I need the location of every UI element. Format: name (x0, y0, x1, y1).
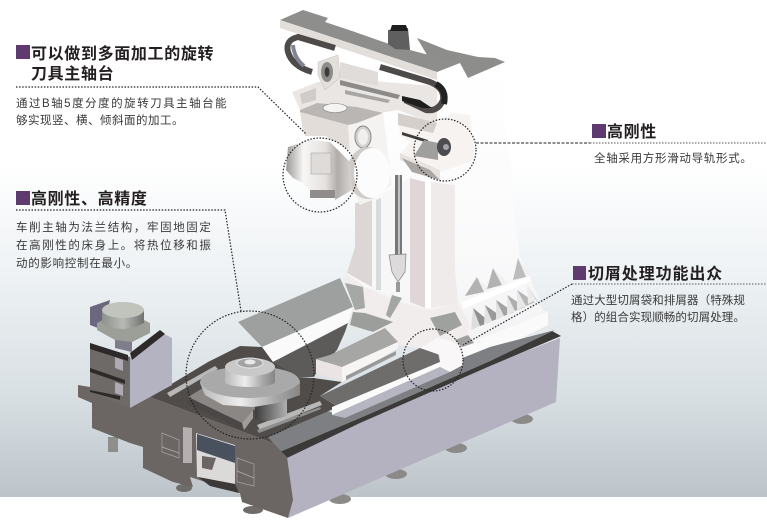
column base block (462, 312, 548, 370)
callout: chip handling (571, 264, 745, 324)
heading (592, 122, 657, 141)
body text (571, 293, 745, 324)
body text: 通过大型切屑袋和排屑器（特殊规 (571, 293, 745, 307)
callout circle: spindle (283, 138, 357, 212)
callout circle: guideway (414, 119, 476, 181)
way cover strip (320, 348, 450, 418)
bed left dark face (78, 385, 293, 518)
underline: high rigidity (590, 142, 767, 144)
body text: 车削主轴为法兰结构，牢固地固定 (16, 220, 212, 234)
heading (16, 44, 214, 83)
way cover box (316, 328, 398, 382)
callout circle: turning spindle (186, 311, 314, 439)
body text: 够实现竖、横、倾斜面的加工。 (16, 113, 184, 127)
carriage interior (292, 55, 437, 125)
B axis spindle cylinder (286, 140, 352, 200)
back gray beam extension (417, 38, 505, 78)
callout: rotary tool spindle (16, 44, 228, 127)
cable chain left (287, 37, 335, 72)
heading: 切屑处理功能出众 (588, 264, 723, 283)
bed lavender side (287, 338, 560, 518)
body text: 全轴采用方形滑动导轨形式。 (594, 151, 753, 165)
bed floor (150, 346, 342, 443)
rotary table (188, 358, 300, 430)
tool magazine motor unit (90, 300, 172, 408)
column foot (345, 273, 474, 348)
machine tool illustration (78, 10, 561, 518)
ram head block (300, 103, 392, 205)
heading: 高刚性、高精度 (31, 189, 148, 208)
bed feet (108, 414, 533, 514)
leader line: turning spindle (16, 210, 241, 311)
leader line: guideway (476, 142, 590, 144)
body text (16, 220, 212, 270)
ball screw motor on top (388, 25, 410, 50)
callout circle: chip chute (403, 329, 463, 391)
column: vertical rails (347, 175, 458, 308)
body text: 在高刚性的床身上。将热位移和振 (16, 238, 212, 252)
callout circles and leader lines (16, 87, 767, 439)
leader line: chip chute (463, 284, 572, 345)
underline: chip handling (572, 283, 767, 285)
leader line: spindle (16, 87, 306, 134)
body text: 通过B轴5度分度的旋转刀具主轴台能 (16, 96, 228, 110)
linear guides (167, 366, 322, 433)
panels on bed face (162, 433, 254, 486)
body text: 动的影响控制在最小。 (16, 256, 138, 270)
bed grey bevel (268, 330, 555, 453)
body text (16, 96, 228, 127)
top beam (280, 10, 458, 80)
body text: 格）的组合实现顺畅的切屑处理。 (571, 310, 745, 324)
chute: center wedge (238, 278, 353, 378)
bed top dark strip (277, 331, 561, 458)
column: large right body (345, 62, 548, 372)
heading: 可以做到多面加工的旋转 (31, 44, 214, 63)
callout: high rigidity (592, 122, 753, 165)
cable chain right (380, 67, 445, 110)
Y axis guide slide (398, 113, 475, 180)
column ribs (462, 258, 542, 330)
heading: 刀具主轴台 (31, 64, 114, 83)
callout: high rigidity and precision (16, 189, 212, 270)
heading: 高刚性 (607, 122, 657, 141)
end block (420, 338, 463, 372)
bed front opening with spring cover (183, 427, 239, 493)
